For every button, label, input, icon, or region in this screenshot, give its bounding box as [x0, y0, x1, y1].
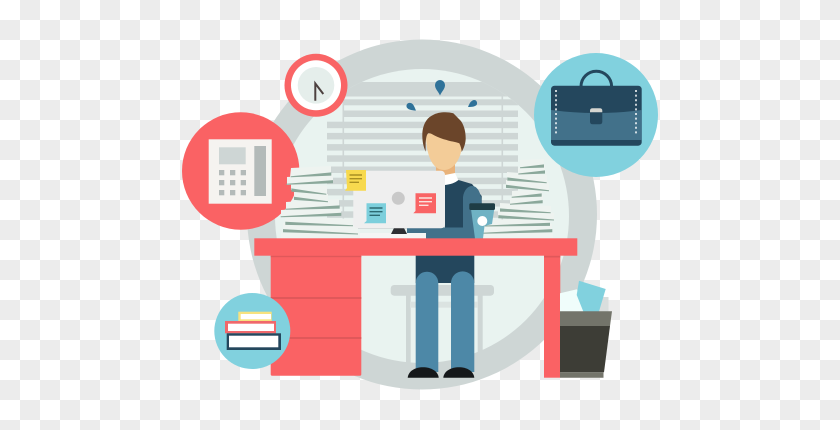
laptop logo	[392, 192, 405, 205]
bin base	[560, 372, 604, 378]
coffee cup	[469, 203, 495, 238]
red book	[225, 321, 276, 333]
right paper stack	[481, 159, 554, 238]
office worker illustration	[182, 40, 658, 390]
laptop stand	[391, 228, 407, 234]
laptop	[345, 170, 445, 238]
red sticky note	[413, 193, 436, 213]
blue paper	[577, 281, 606, 312]
crumpled white paper	[560, 289, 585, 312]
left leg	[416, 272, 438, 372]
lower torso	[416, 255, 474, 283]
briefcase badge	[534, 53, 658, 177]
background disc	[247, 40, 597, 390]
window blinds	[327, 82, 518, 231]
neck	[436, 162, 455, 180]
phone badge	[182, 112, 299, 230]
sweat drops	[406, 80, 477, 110]
face	[426, 125, 462, 170]
waste bin	[560, 281, 612, 378]
yellow book	[238, 312, 272, 321]
left shoe	[408, 367, 439, 378]
bin body	[560, 326, 610, 372]
yellow sticky note	[345, 170, 366, 191]
desk leg	[544, 255, 560, 378]
grey paper	[598, 297, 608, 312]
hair	[422, 112, 466, 152]
bin rim	[560, 311, 612, 326]
chair	[391, 285, 494, 365]
desktop	[254, 238, 577, 256]
collar	[445, 173, 458, 185]
books badge	[214, 293, 290, 369]
worker	[407, 112, 482, 378]
drawer unit	[271, 255, 361, 376]
right shoe	[443, 367, 474, 378]
right leg	[451, 271, 474, 372]
desk	[254, 238, 577, 378]
laptop base	[360, 233, 426, 238]
laptop lid	[353, 171, 445, 228]
sweater	[416, 180, 482, 240]
wall clock	[284, 54, 348, 117]
arm	[407, 186, 482, 240]
blue sticky note	[364, 203, 386, 223]
navy book	[227, 333, 281, 350]
left paper stack	[281, 166, 360, 238]
